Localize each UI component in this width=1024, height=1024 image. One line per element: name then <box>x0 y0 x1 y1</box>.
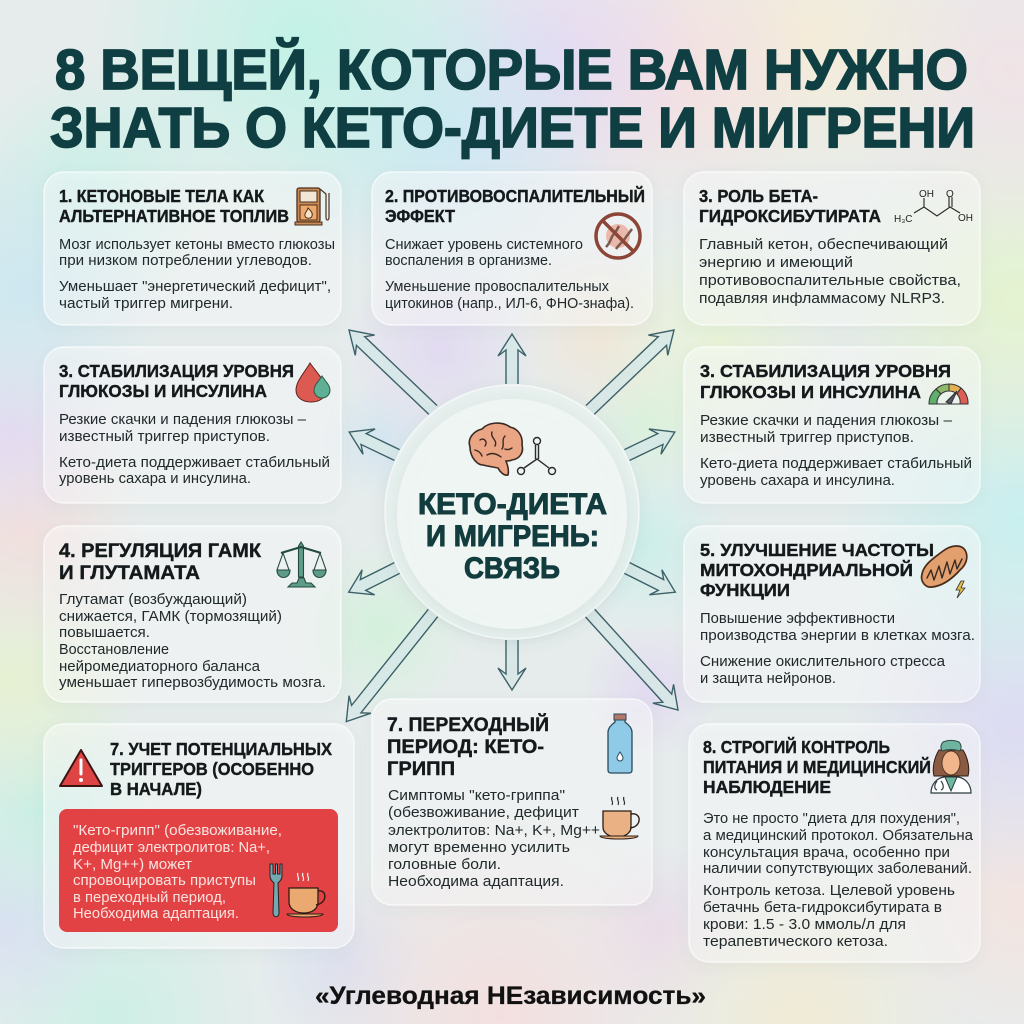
heading glucose right <box>700 361 951 402</box>
icon: BHB molecule: OH <box>958 213 973 224</box>
body 3: противовоспалительные свойства, <box>699 273 961 289</box>
callout: red warning box <box>59 809 338 932</box>
hub title: СВЯЗЬ <box>464 552 560 585</box>
body 5: и защита нейронов. <box>700 671 836 687</box>
panel: glucose left <box>44 347 341 503</box>
icon: gauge <box>929 384 968 404</box>
body glucose left: известный триггер приступов. <box>59 429 270 445</box>
body 2: воспаления в организме. <box>385 253 552 269</box>
body keto flu <box>388 788 600 890</box>
heading keto flu: ГРИПП <box>387 759 455 780</box>
body 8: а медицинский протокол. Обязательна <box>703 828 974 844</box>
body 5: производства энергии в клетках мозга. <box>700 628 975 644</box>
body glucose left: Резкие скачки и падения глюкозы – <box>59 412 307 428</box>
heading triggers: 7. УЧЕТ ПОТЕНЦИАЛЬНЫХ <box>110 739 332 759</box>
icon: coffee cup <box>287 873 325 917</box>
hub title: КЕТО-ДИЕТА <box>418 488 607 521</box>
heading 8 <box>703 736 931 797</box>
body 1: частый триггер мигрени. <box>59 296 233 312</box>
title: ЗНАТЬ О КЕТО-ДИЕТЕ И МИГРЕНИ <box>50 96 975 160</box>
body 8: наличии сопутствующих заболеваний. <box>703 861 972 877</box>
body 8 <box>703 811 974 950</box>
panel: 7 keto flu <box>372 699 652 905</box>
heading 2 <box>385 185 645 226</box>
body 2 <box>385 237 634 312</box>
callout: red warning box: дефицит электролитов: Na+, <box>73 840 270 856</box>
body 1: Мозг использует кетоны вместо глюкозы <box>59 237 335 253</box>
callout: red warning box: в переходный период, <box>73 890 226 906</box>
heading glucose right: ГЛЮКОЗЫ И ИНСУЛИНА <box>700 382 921 402</box>
heading triggers <box>110 739 332 799</box>
heading 3 <box>699 186 881 226</box>
body glucose right: уровень сахара и инсулина. <box>700 473 895 489</box>
arrows radiating from centre <box>335 320 688 730</box>
heading glucose left: ГЛЮКОЗЫ И ИНСУЛИНА <box>59 381 267 401</box>
title: 8 ВЕЩЕЙ, КОТОРЫЕ ВАМ НУЖНО <box>55 37 968 102</box>
hub title <box>418 488 607 585</box>
panel: 2 anti-inflammatory <box>372 172 652 325</box>
heading 5 <box>700 540 934 600</box>
panel: triggers warning <box>44 724 354 948</box>
body 1: при низком потреблении углеводов. <box>59 253 312 269</box>
title <box>50 37 975 160</box>
heading 5: 5. УЛУЧШЕНИЕ ЧАСТОТЫ <box>700 540 934 560</box>
body 2: Снижает уровень системного <box>385 237 583 253</box>
body 1: Уменьшает "энергетический дефицит", <box>59 279 331 295</box>
icon: carbonate molecule <box>518 438 556 474</box>
body 8: консультация врача, особенно при <box>703 845 950 861</box>
heading 8: НАБЛЮДЕНИЕ <box>703 777 831 797</box>
icon: doctor <box>931 740 971 793</box>
body 5: Повышение эффективности <box>700 611 895 627</box>
body 8: терапевтического кетоза. <box>703 934 888 950</box>
heading keto flu: 7. ПЕРЕХОДНЫЙ <box>387 714 549 736</box>
icon: cup of tea <box>600 797 639 839</box>
body keto flu: могут временно усилить <box>388 840 570 856</box>
heading 4: И ГЛУТАМАТА <box>59 562 200 584</box>
heading 2: ЭФФЕКТ <box>385 206 455 226</box>
body glucose left: уровень сахара и инсулина. <box>59 471 251 487</box>
footer: «Углеводная НЕзависимость» <box>315 982 706 1010</box>
body 4: уменьшает гипервозбудимость мозга. <box>59 675 326 691</box>
heading glucose right: 3. СТАБИЛИЗАЦИЯ УРОВНЯ <box>700 361 951 381</box>
icon: scales <box>277 542 326 587</box>
body 8: крови: 1.5 - 3.0 ммоль/л для <box>703 917 906 933</box>
heading triggers: ТРИГГЕРОВ (ОСОБЕННО <box>110 759 314 779</box>
heading 3: ГИДРОКСИБУТИРАТА <box>699 206 881 226</box>
body 3: подавляя инфламмасому NLRP3. <box>699 291 945 307</box>
heading 1 <box>59 186 289 226</box>
body 4: нейромедиаторного баланса <box>59 659 261 675</box>
body keto flu: электролитов: Na+, K+, Mg++ <box>388 823 600 839</box>
heading 3: 3. РОЛЬ БЕТА- <box>699 186 818 206</box>
body 5 <box>700 611 975 687</box>
body 8: Это не просто "диета для похудения", <box>703 811 960 827</box>
icon: BHB molecule: OH <box>919 189 934 200</box>
body glucose right: Резкие скачки и падения глюкозы – <box>700 413 953 429</box>
heading 8: ПИТАНИЯ И МЕДИЦИНСКИЙ <box>703 756 931 777</box>
icon: warning triangle <box>60 750 102 786</box>
heading triggers: В НАЧАЛЕ) <box>110 779 202 799</box>
panel: 5 mitochondria <box>684 526 980 702</box>
body glucose left <box>59 412 330 487</box>
body 4: снижается, ГАМК (тормозящий) <box>59 609 282 625</box>
icon: BHB molecule: H₃C <box>894 214 913 225</box>
panel: glucose right <box>684 347 980 503</box>
callout: red warning box: "Кето-грипп" (обезвоживание, <box>73 823 282 839</box>
body 2: Уменьшение провоспалительных <box>385 279 610 295</box>
body keto flu: головные боли. <box>388 857 501 873</box>
body 3: Главный кетон, обеспечивающий <box>699 237 948 253</box>
body 4: Восстановление <box>59 642 169 658</box>
body 4: Глутамат (возбуждающий) <box>59 592 247 608</box>
heading 1: 1. КЕТОНОВЫЕ ТЕЛА КАК <box>59 186 264 206</box>
icon: brain <box>469 423 523 475</box>
heading keto flu <box>387 714 549 780</box>
body 2: цитокинов (напр., ИЛ-6, ФНО-знафа). <box>385 296 634 312</box>
body keto flu: Симптомы "кето-гриппа" <box>388 788 565 804</box>
callout: red warning box: K+, Mg++) может <box>73 857 192 873</box>
body 4 <box>59 592 326 691</box>
body 4: повышается. <box>59 625 150 641</box>
body 3 <box>699 237 961 307</box>
panel: 4 GABA and glutamate <box>44 526 341 702</box>
icon: fuel pump <box>295 188 329 225</box>
icon: blood drop <box>296 363 330 402</box>
heading glucose left <box>59 361 294 401</box>
body 1 <box>59 237 335 312</box>
callout: red warning box: спровоцировать приступы <box>73 873 256 889</box>
icon: BHB molecule <box>894 189 973 225</box>
body 5: Снижение окислительного стресса <box>700 654 946 670</box>
body glucose right <box>700 413 972 489</box>
hub title: И МИГРЕНЬ: <box>426 520 599 553</box>
body glucose right: Кето-диета поддерживает стабильный <box>700 456 972 472</box>
heading 2: 2. ПРОТИВОВОСПАЛИТЕЛЬНЫЙ <box>385 185 645 206</box>
heading 1: АЛЬТЕРНАТИВНОЕ ТОПЛИВ <box>59 206 289 226</box>
callout: red warning box: Необходима адаптация. <box>73 906 239 922</box>
icon: water bottle <box>608 714 632 773</box>
central hub circle <box>385 385 639 639</box>
heading 8: 8. СТРОГИЙ КОНТРОЛЬ <box>703 736 890 757</box>
body 8: Контроль кетоза. Целевой уровень <box>703 883 955 899</box>
heading 5: ФУНКЦИИ <box>700 580 790 600</box>
panel: 8 medical supervision <box>689 724 980 962</box>
icon: mitochondrion <box>922 546 967 598</box>
body keto flu: (обезвоживание, дефицит <box>388 805 579 821</box>
heading 5: МИТОХОНДРИАЛЬНОЙ <box>700 559 913 580</box>
icon: fork <box>270 864 282 917</box>
icon: inflammation crossed out <box>596 214 640 258</box>
icon: BHB molecule: O <box>946 189 954 200</box>
body 3: энергию и имеющий <box>699 255 853 271</box>
panel: 1 ketone bodies <box>44 172 341 325</box>
body 8: бетачнь бета-гидроксибутирата в <box>703 900 942 916</box>
body keto flu: Необходима адаптация. <box>388 874 564 890</box>
panel: 3 beta-hydroxybutyrate <box>684 172 980 325</box>
heading glucose left: 3. СТАБИЛИЗАЦИЯ УРОВНЯ <box>59 361 294 381</box>
body glucose right: известный триггер приступов. <box>700 430 914 446</box>
heading keto flu: ПЕРИОД: КЕТО- <box>387 737 544 758</box>
body glucose left: Кето-диета поддерживает стабильный <box>59 455 330 471</box>
heading 4: 4. РЕГУЛЯЦИЯ ГАМК <box>59 540 261 562</box>
heading 4 <box>59 540 261 584</box>
